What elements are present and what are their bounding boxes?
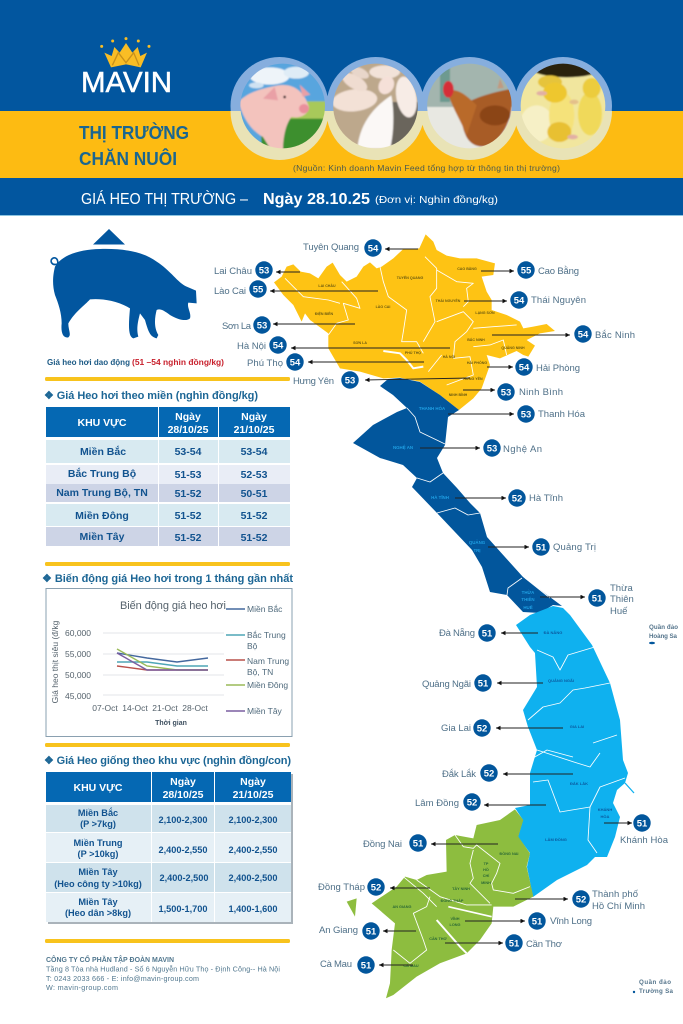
province names on map: LÀO CAI — [376, 304, 390, 309]
province name labels: Ninh Bình — [519, 387, 563, 398]
province name labels: Cà Mau — [320, 959, 352, 970]
province price badges: 54 — [519, 362, 530, 374]
icon: pig silhouette — [51, 249, 197, 338]
province price badges: 51 — [637, 818, 648, 830]
province name labels: Thiên — [610, 594, 634, 605]
province price badges: 52 — [484, 768, 494, 780]
province names on map: MINH — [481, 881, 491, 885]
province name labels: Thái Nguyên — [531, 295, 586, 306]
province names on map: ĐỒNG NAI — [500, 851, 518, 856]
table: live pig prices: 21/10/25 — [234, 424, 275, 436]
province names on map: HÀ TĨNH — [431, 495, 449, 500]
table: breeding pig prices: Ngày — [240, 776, 266, 788]
province names on map: HẢI PHÒNG — [467, 360, 487, 365]
province names on map: NINH BÌNH — [449, 392, 468, 397]
province names on map: ĐẮK LẮK — [570, 781, 588, 786]
province names on map: KHÁNH — [598, 807, 612, 812]
footer: company contact: Tầng 8 Tòa nhà Hudland - Số 6 Nguyễn Hữu Thọ - Định Công-- Hà Nội — [46, 964, 280, 974]
table: live pig prices: 53-54 — [241, 446, 268, 458]
province name labels: Gia Lai — [441, 723, 471, 734]
province names on map: HÀ NỘI — [443, 354, 455, 359]
table: breeding pig prices: Miền Trung — [74, 838, 122, 848]
province price badges: 55 — [253, 284, 264, 296]
province name labels: Sơn La — [222, 321, 252, 332]
province price badges: 52 — [477, 724, 487, 734]
province price badges — [249, 239, 651, 974]
heading: Thị trường chăn nuôi: THỊ TRƯỜNG — [79, 122, 189, 143]
table: live pig prices — [46, 407, 290, 546]
province price badges: 51 — [592, 594, 603, 604]
map: north central region — [353, 378, 562, 613]
title bar text: Ngày 28.10.25 — [263, 191, 370, 208]
province names on map: LONG — [450, 923, 461, 927]
province price badges: 54 — [368, 244, 379, 254]
province price badges: 53 — [521, 410, 531, 420]
pig caption — [47, 358, 224, 367]
province price badges: 51 — [413, 838, 424, 850]
table: breeding pig prices: 28/10/25 — [163, 789, 204, 801]
province name labels: Đắk Lắk — [442, 769, 476, 780]
pig caption: Giá heo hơi dao động — [47, 358, 130, 367]
line chart: price trend: Bộ, TN — [247, 667, 273, 677]
islands: Trường Sa — [633, 979, 674, 995]
line chart: price trend — [46, 588, 292, 736]
line chart: price trend: Nam Trung — [247, 656, 289, 666]
province names on map: GIA LAI — [570, 724, 584, 729]
province name labels: Đồng Nai — [363, 839, 402, 850]
province name labels: Hưng Yên — [293, 376, 334, 387]
province names on map — [315, 266, 612, 968]
table: breeding pig prices: 1,500-1,700 — [158, 904, 208, 914]
province names on map: TUYÊN QUANG — [397, 275, 423, 280]
line chart: price trend: 28-Oct — [182, 703, 208, 713]
province name labels: Nghệ An — [503, 444, 542, 455]
province names on map: TÂY NINH — [452, 886, 470, 891]
footer: company contact: CÔNG TY CỔ PHẦN TẬP ĐOÀN MAVIN — [46, 954, 174, 964]
province names on map: QUẢNG NINH — [501, 345, 525, 350]
province name labels: Phú Thọ — [247, 358, 283, 369]
province names on map: QUẢNG NGÃI — [548, 678, 574, 683]
province names on map: ĐÀ NẴNG — [544, 630, 562, 635]
province name labels: Quảng Trị — [553, 542, 596, 553]
table: live pig prices: 53-54 — [175, 446, 202, 458]
province name labels — [214, 242, 669, 970]
province names on map: LAI CHÂU — [318, 283, 336, 288]
line chart: price trend: Thời gian — [155, 720, 187, 727]
province name labels: Lâm Đồng — [415, 798, 459, 809]
logo: Mavin crown and wordmark: MAVIN — [81, 67, 172, 99]
province price badges: 53 — [501, 388, 511, 398]
line chart: price trend: 60,000 — [65, 628, 91, 638]
province names on map: TRỊ — [473, 548, 481, 553]
islands: Hoàng Sa: Quần đảo — [649, 624, 678, 631]
province names on map: CAO BẰNG — [457, 266, 477, 271]
table: live pig prices: 51-52 — [175, 532, 202, 544]
table: live pig prices: 51-52 — [175, 510, 202, 522]
table: breeding pig prices: (Heo dân >8kg) — [65, 908, 131, 918]
line chart: price trend: 21-Oct — [152, 703, 178, 713]
table: breeding pig prices: 2,400-2,550 — [158, 845, 208, 855]
line chart: price trend: 55,000 — [65, 649, 91, 659]
province names on map: HỒ — [483, 867, 489, 872]
title bar text — [81, 189, 498, 208]
footer: company contact — [46, 954, 280, 992]
heading: breeding pig price: ❖ Giá Heo giống theo khu vực (nghìn đồng/con) — [44, 755, 291, 767]
province names on map: CHÍ — [483, 873, 490, 878]
table: live pig prices: Miền Bắc — [80, 445, 126, 458]
province names on map: ĐỒNG THÁP — [441, 898, 464, 903]
table: breeding pig prices: 2,400-2,500 — [159, 873, 209, 883]
province price badges: 53 — [345, 376, 355, 386]
province names on map: HÒA — [601, 814, 610, 819]
province names on map: TP — [484, 862, 489, 866]
photo: pig — [230, 57, 328, 160]
divider — [45, 562, 290, 566]
province name labels: Tuyên Quang — [303, 242, 359, 253]
province names on map: THIÊN — [521, 597, 535, 602]
table: breeding pig prices: 21/10/25 — [233, 789, 274, 801]
province name labels: Thừa — [610, 583, 633, 594]
province price badges: 51 — [509, 938, 520, 950]
province name labels: Quảng Ngãi — [422, 679, 471, 690]
table: breeding pig prices: 2,400-2,500 — [228, 873, 278, 883]
province names on map: CẦN THƠ — [429, 937, 448, 941]
islands: Hoàng Sa: Hoàng Sa — [649, 633, 678, 640]
province names on map: ĐIỆN BIÊN — [315, 311, 333, 316]
province name labels: An Giang — [319, 925, 358, 936]
province name labels: Thành phố — [592, 889, 639, 900]
table: breeding pig prices: Miền Tây — [78, 897, 119, 907]
table: live pig prices: Miền Đông — [75, 510, 129, 522]
table: live pig prices: 50-51 — [241, 488, 268, 500]
province name labels: Hà Nội — [237, 341, 266, 352]
line chart: price trend: 50,000 — [65, 670, 91, 680]
province names on map: HUẾ — [523, 605, 533, 610]
province price badges: 52 — [512, 494, 522, 504]
province name labels: Khánh Hòa — [620, 835, 669, 846]
province name labels: Cao Bằng — [538, 266, 579, 277]
map: southern region — [347, 809, 533, 998]
table: live pig prices: Bắc Trung Bộ — [68, 467, 136, 480]
province names on map: THỪA — [522, 590, 535, 595]
province price badges: 51 — [366, 926, 377, 938]
icon: up triangle — [93, 229, 125, 244]
line chart: price trend: Miền Tây — [247, 706, 283, 716]
table: live pig prices: Nam Trung Bộ, TN — [56, 487, 148, 499]
table: breeding pig prices: Miền Bắc — [78, 807, 118, 818]
province price badges: 51 — [532, 916, 543, 928]
province names on map: LÂM ĐỒNG — [545, 837, 567, 842]
province names on map: BẮC NINH — [467, 337, 485, 342]
footer: company contact: T: 0243 2033 666 - E: info@mavin-group.com — [46, 974, 199, 983]
line chart: price trend: Bộ — [247, 641, 258, 651]
province price badges: 51 — [536, 542, 547, 554]
province price badges: 51 — [478, 678, 489, 690]
title bar text: (Đơn vị: Nghìn đồng/kg) — [375, 194, 498, 206]
islands: Trường Sa: Trường Sa — [639, 988, 674, 995]
line chart: price trend: 07-Oct — [92, 703, 118, 713]
province name labels: Thanh Hóa — [538, 409, 586, 420]
divider — [45, 377, 290, 381]
province name labels: Lai Châu — [214, 266, 252, 277]
source note: (Nguồn: Kinh doanh Mavin Feed tổng hợp từ thông tin thị trường) — [293, 163, 560, 173]
province price badges: 52 — [576, 894, 586, 906]
table: live pig prices: 51-52 — [241, 510, 268, 522]
table: breeding pig prices: 2,400-2,550 — [228, 845, 278, 855]
province name labels: Huế — [610, 606, 628, 617]
province names on map: VĨNH — [450, 916, 460, 921]
table: live pig prices: 51-52 — [241, 532, 268, 544]
province name labels: Cần Thơ — [526, 939, 562, 950]
table: breeding pig prices: (P >7kg) — [80, 819, 116, 829]
province price badges: 52 — [371, 882, 381, 894]
province names on map: QUẢNG — [469, 540, 486, 545]
photo: pigs in pen — [326, 57, 424, 160]
table: breeding pig prices: 2,100-2,300 — [158, 815, 208, 825]
province name labels: Hà Tĩnh — [529, 493, 563, 504]
line chart: price trend: Biến động giá heo hơi — [120, 600, 226, 612]
table: breeding pig prices: 1,400-1,600 — [228, 904, 278, 914]
line chart: price trend: Miền Đông — [247, 680, 288, 690]
province names on map: PHÚ THỌ — [405, 350, 421, 355]
province price badges: 53 — [487, 444, 497, 454]
province names on map: NGHỆ AN — [393, 445, 413, 450]
province names on map: THANH HÓA — [419, 406, 446, 411]
divider — [45, 743, 290, 747]
province names on map: AN GIANG — [392, 905, 412, 909]
photo: chicken — [420, 57, 518, 160]
table: breeding pig prices: (Heo công ty >10kg) — [54, 879, 142, 889]
table: live pig prices: Miền Tây — [80, 531, 125, 543]
line chart: price trend: Bắc Trung — [247, 630, 286, 640]
table: breeding pig prices: Miền Tây — [78, 867, 119, 877]
table: breeding pig prices: Ngày — [170, 776, 196, 788]
province names on map: LẠNG SƠN — [475, 311, 495, 315]
province names on map: SƠN LA — [353, 341, 367, 345]
line chart: price trend: Giá heo thịt siêu (đ/kg — [50, 620, 60, 703]
title bar text: GIÁ HEO THỊ TRƯỜNG – — [81, 189, 248, 208]
province price badges: 54 — [273, 340, 284, 352]
province names on map: CÀ MAU — [403, 963, 419, 968]
pig caption: (51 –54 nghìn đồng/kg) — [132, 358, 224, 367]
divider — [45, 939, 290, 943]
province price badges: 54 — [290, 358, 301, 368]
province name labels: Vĩnh Long — [550, 916, 592, 927]
header banner — [0, 0, 683, 216]
province price badges: 54 — [514, 296, 525, 306]
province price badges: 53 — [257, 320, 267, 332]
map: south central region — [515, 606, 634, 897]
table: breeding pig prices: 2,100-2,300 — [228, 815, 278, 825]
province price badges: 51 — [482, 628, 493, 640]
province name labels: Đồng Tháp — [318, 882, 365, 893]
islands: Trường Sa: Quần đảo — [639, 979, 671, 986]
islands: Hoàng Sa — [649, 624, 678, 644]
heading: Thị trường chăn nuôi — [79, 122, 189, 169]
table: live pig prices: Ngày — [175, 411, 201, 423]
logo: Mavin crown and wordmark — [81, 37, 172, 99]
province name labels: Bắc Ninh — [595, 330, 635, 341]
table: live pig prices: Ngày — [241, 411, 267, 423]
table: live pig prices: 52-53 — [241, 469, 268, 481]
province name labels: Hồ Chí Minh — [592, 901, 645, 912]
province price badges: 52 — [467, 798, 477, 808]
table: breeding pig prices: (P >10kg) — [78, 849, 118, 859]
province name labels: Đà Nẵng — [439, 628, 475, 639]
province price badges: 51 — [361, 960, 372, 972]
line chart: price trend: 45,000 — [65, 691, 91, 701]
province price badges: 54 — [578, 330, 589, 340]
photo: ducklings — [514, 57, 612, 160]
province names on map: HƯNG YÊN — [463, 376, 483, 381]
line chart: price trend: Miền Bắc — [247, 604, 283, 614]
table: breeding pig prices: KHU VỰC — [74, 782, 123, 794]
table: live pig prices: KHU VỰC — [78, 417, 127, 429]
province name labels: Lào Cai — [214, 286, 246, 297]
heading: live pig price by region: ❖ Giá Heo hơi theo miền (nghìn đồng/kg) — [44, 390, 258, 402]
heading: one month price trend: ❖ Biến động giá Heo hơi trong 1 tháng gần nhất — [42, 573, 293, 585]
line chart: price trend: 14-Oct — [122, 703, 148, 713]
footer: company contact: W: mavin-group.com — [46, 983, 118, 992]
province names on map: THÁI NGUYÊN — [436, 298, 461, 303]
province price badges: 53 — [259, 266, 269, 276]
province name labels: Hải Phòng — [536, 363, 580, 374]
map leader arrows — [270, 249, 632, 965]
table: live pig prices: 51-52 — [175, 488, 202, 500]
province price badges: 55 — [521, 266, 532, 276]
table: live pig prices: 28/10/25 — [168, 424, 209, 436]
table: live pig prices: 51-53 — [175, 469, 202, 481]
heading: Thị trường chăn nuôi: CHĂN NUÔI — [79, 148, 177, 169]
map: northern region — [274, 234, 555, 410]
table: breeding pig prices — [46, 772, 293, 924]
